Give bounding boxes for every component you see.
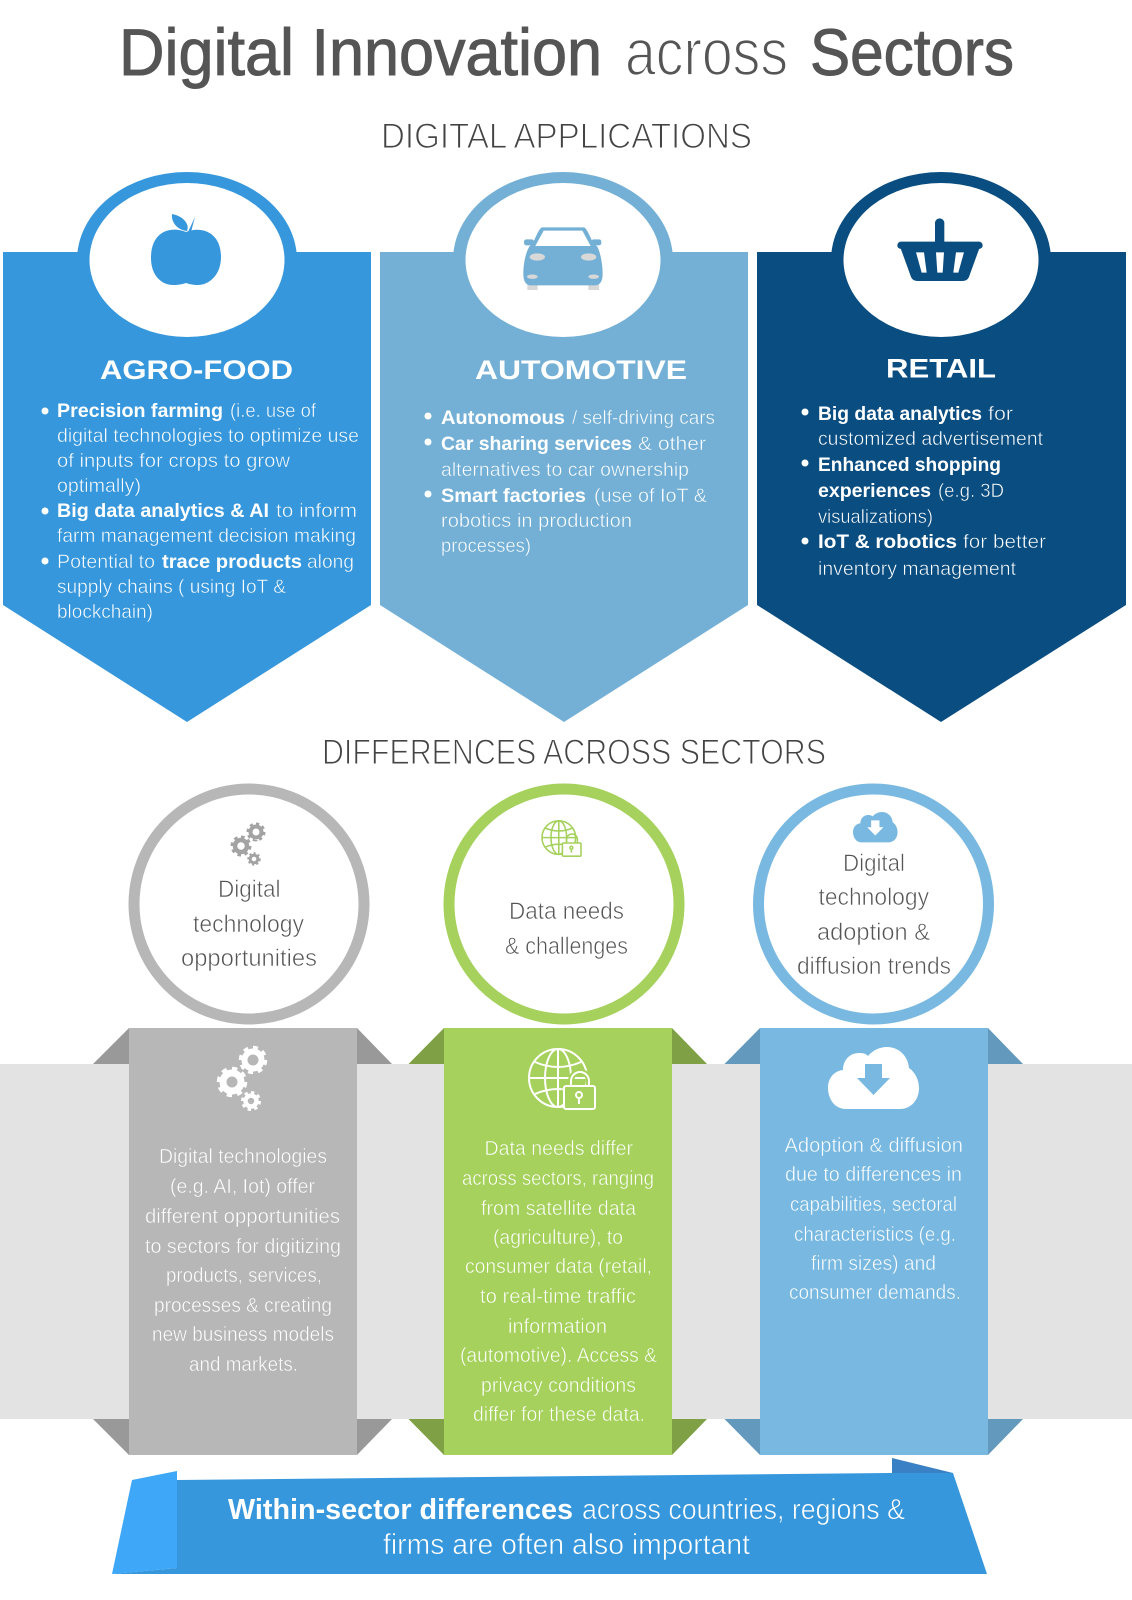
banner text (228, 1494, 905, 1561)
bullet list: agro-food: supply chains ( using IoT & (57, 576, 286, 598)
bullet list: automotive: / self-driving cars (572, 407, 715, 429)
circle: digital technology opportunities (134, 789, 364, 1019)
title (119, 15, 1014, 89)
icon: gears (219, 1048, 265, 1110)
icon: small cloud download (853, 812, 898, 842)
icon: globe with lock (529, 1049, 595, 1109)
bullet list: automotive: (use of IoT & (594, 485, 707, 507)
bullet list: agro-food: optimally) (57, 475, 141, 497)
bullet list: retail: for better (963, 531, 1047, 553)
bullet list: agro-food: to inform (276, 500, 357, 522)
circle text: diffusion trends (797, 953, 951, 980)
text: digital technologies: processes & creating (154, 1295, 332, 1317)
title: Sectors (810, 15, 1014, 89)
text: digital technologies: to sectors for digitizing (145, 1236, 341, 1258)
icon: car (523, 227, 603, 290)
icon: basket (897, 218, 983, 281)
bullet list: retail (802, 403, 1047, 580)
circle text: & challenges (505, 933, 628, 960)
circle text: technology (818, 884, 929, 911)
bullet list: automotive (424, 407, 715, 557)
bullet list: automotive: & other (638, 433, 707, 455)
text: data needs differ (460, 1138, 658, 1426)
bullet list: automotive: Smart factories (441, 485, 586, 507)
panel heading: automotive: AUTOMOTIVE (475, 355, 687, 385)
text: digital technologies (145, 1146, 341, 1376)
bullet list: retail: Enhanced shopping (818, 454, 1001, 476)
text: data needs differ: information (508, 1316, 607, 1338)
text: adoption and diffusion (784, 1135, 963, 1304)
heading: digital applications: DIGITAL APPLICATIONS (381, 117, 752, 156)
banner text: firms are often also important (383, 1529, 750, 1561)
bullet list: agro-food: Big data analytics & AI (57, 500, 269, 522)
bullet list: retail: customized advertisement (818, 428, 1044, 450)
text: digital technologies: different opportunities (145, 1206, 340, 1228)
text: data needs differ: (automotive). Access & (460, 1345, 658, 1367)
circle text: Digital (843, 850, 905, 877)
banner text: Within-sector differences (228, 1494, 573, 1526)
bullet list: retail: for (988, 403, 1014, 425)
banner: within-sector differences (112, 1458, 987, 1574)
grey background band (0, 1064, 1132, 1419)
circle text: Data needs (509, 898, 624, 925)
text: adoption and diffusion: Adoption & diffusion (784, 1135, 963, 1157)
text: data needs differ: privacy conditions (481, 1375, 636, 1397)
text: data needs differ: differ for these data. (473, 1404, 645, 1426)
panel: automotive (380, 172, 748, 722)
title: Digital Innovation (119, 15, 602, 89)
bullet list: agro-food: along (307, 551, 354, 573)
circle: digital technology adoption and diffusion trends (758, 789, 988, 1019)
bullet list: agro-food: digital technologies to optimize use (57, 425, 359, 447)
bullet list: agro-food: of inputs for crops to grow (57, 450, 291, 472)
icon: small gears (232, 824, 264, 865)
text: data needs differ: consumer data (retail, (465, 1256, 652, 1278)
heading: differences across sectors: DIFFERENCES ACROSS SECTORS (322, 733, 826, 772)
text: digital technologies: (e.g. AI, Iot) offer (170, 1176, 315, 1198)
text: data needs differ: Data needs differ (484, 1138, 633, 1160)
circle text: adoption & (817, 919, 930, 946)
icon: cloud download (828, 1047, 919, 1109)
bullet list: automotive: robotics in production (441, 510, 632, 532)
bullet list: retail: (e.g. 3D (938, 480, 1004, 502)
ribbon: grey column (93, 1028, 392, 1455)
circle text (797, 850, 951, 980)
bullet list: retail: visualizations) (818, 506, 933, 528)
bullet list: automotive: alternatives to car ownership (441, 459, 689, 481)
bullet list: automotive: Car sharing services (441, 433, 632, 455)
text: data needs differ: to real-time traffic (480, 1286, 636, 1308)
text: digital technologies: products, services, (166, 1265, 322, 1287)
text: data needs differ: from satellite data (481, 1198, 637, 1220)
bullet list: agro-food: Precision farming (57, 400, 223, 422)
circle text (181, 876, 317, 972)
circle text: technology (193, 911, 304, 938)
bullet list: retail: experiences (818, 480, 931, 502)
bullet list: automotive: Autonomous (441, 407, 565, 429)
bullet list: agro-food: farm management decision making (57, 525, 356, 547)
panel: agro-food (3, 172, 371, 722)
text: digital technologies: Digital technologies (159, 1146, 327, 1168)
ribbon: blue column (724, 1028, 1023, 1455)
text: digital technologies: and markets. (189, 1354, 298, 1376)
banner text: across countries, regions & (582, 1494, 905, 1526)
circle text: opportunities (181, 945, 317, 972)
icon: apple (151, 214, 221, 285)
text: data needs differ: (agriculture), to (493, 1227, 623, 1249)
bullet list: retail: inventory management (818, 558, 1017, 580)
text: adoption and diffusion: characteristics (e.g. (794, 1224, 956, 1246)
ribbon: green column (408, 1028, 707, 1455)
text: adoption and diffusion: consumer demands. (789, 1282, 961, 1304)
circle text (505, 898, 628, 960)
bullet list: agro-food: Potential to (57, 551, 155, 573)
text: adoption and diffusion: firm sizes) and (811, 1253, 936, 1275)
circle text: Digital (218, 876, 280, 903)
bullet list: agro-food: (i.e. use of (230, 400, 317, 422)
text: adoption and diffusion: due to differences in (785, 1164, 962, 1186)
bullet list: agro-food (42, 400, 359, 623)
bullet list: agro-food: trace products (162, 551, 302, 573)
icon: small globe with lock (542, 821, 581, 856)
bullet list: automotive: processes) (441, 535, 531, 557)
panel heading: retail: RETAIL (886, 354, 996, 384)
text: adoption and diffusion: capabilities, sectoral (790, 1194, 957, 1216)
panel: retail (757, 172, 1126, 722)
bullet list: retail: Big data analytics (818, 403, 982, 425)
text: digital technologies: new business models (152, 1324, 334, 1346)
circle: data needs and challenges (449, 789, 679, 1019)
text: data needs differ: across sectors, ranging (462, 1168, 654, 1190)
title: across (625, 15, 788, 89)
panel heading: agro-food: AGRO-FOOD (100, 355, 293, 385)
bullet list: retail: IoT & robotics (818, 531, 957, 553)
bullet list: agro-food: blockchain) (57, 601, 153, 623)
